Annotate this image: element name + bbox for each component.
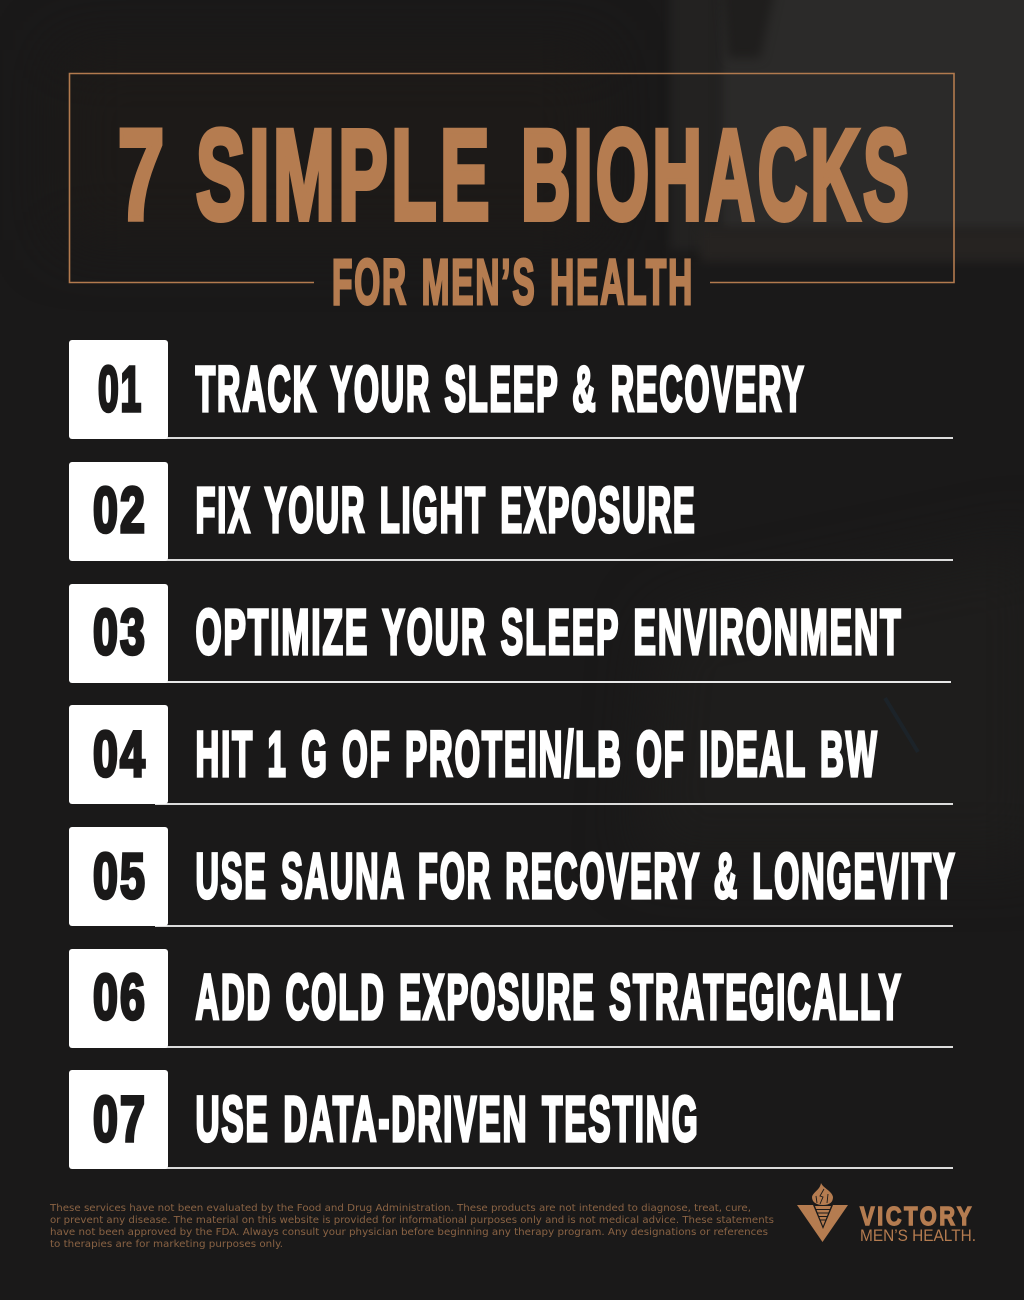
item 04: 04 — [93, 718, 147, 790]
item 05: 05 — [93, 840, 147, 912]
item 03: 03 — [93, 596, 147, 668]
disclaimer — [49, 1203, 774, 1250]
item 01 — [69, 340, 953, 439]
item 01: 01 — [98, 353, 143, 425]
item 06 — [69, 949, 953, 1048]
item 07: 07 — [93, 1083, 147, 1155]
item 02: 02 — [93, 474, 147, 546]
disclaimer: These services have not been evaluated by the Food and Drug Administration. These products are not intended to diagnose, treat, cure, — [49, 1203, 751, 1214]
item 02 — [69, 462, 953, 561]
title: SIMPLE — [196, 104, 493, 247]
item 04 — [69, 705, 953, 805]
disclaimer: or prevent any disease. The material on this website is provided for informational purposes only and is not medical advice. These statements — [50, 1215, 774, 1226]
title — [118, 104, 912, 247]
subtitle: FOR MEN’S HEALTH — [332, 246, 694, 318]
logo — [797, 1183, 976, 1245]
icon: torch V — [797, 1183, 848, 1242]
logo: MEN’S HEALTH. — [860, 1226, 976, 1245]
item 05 — [69, 827, 956, 927]
disclaimer: to therapies are for marketing purposes only. — [50, 1239, 283, 1250]
logo: VICTORY — [860, 1203, 974, 1231]
title frame — [70, 74, 954, 282]
item 03 — [69, 584, 951, 683]
disclaimer: have not been approved by the FDA. Always consult your physician before beginning any therapy program. Any designations or references — [50, 1227, 768, 1238]
title: 7 — [118, 104, 168, 247]
item 07 — [69, 1070, 953, 1169]
item 06: 06 — [93, 961, 147, 1033]
